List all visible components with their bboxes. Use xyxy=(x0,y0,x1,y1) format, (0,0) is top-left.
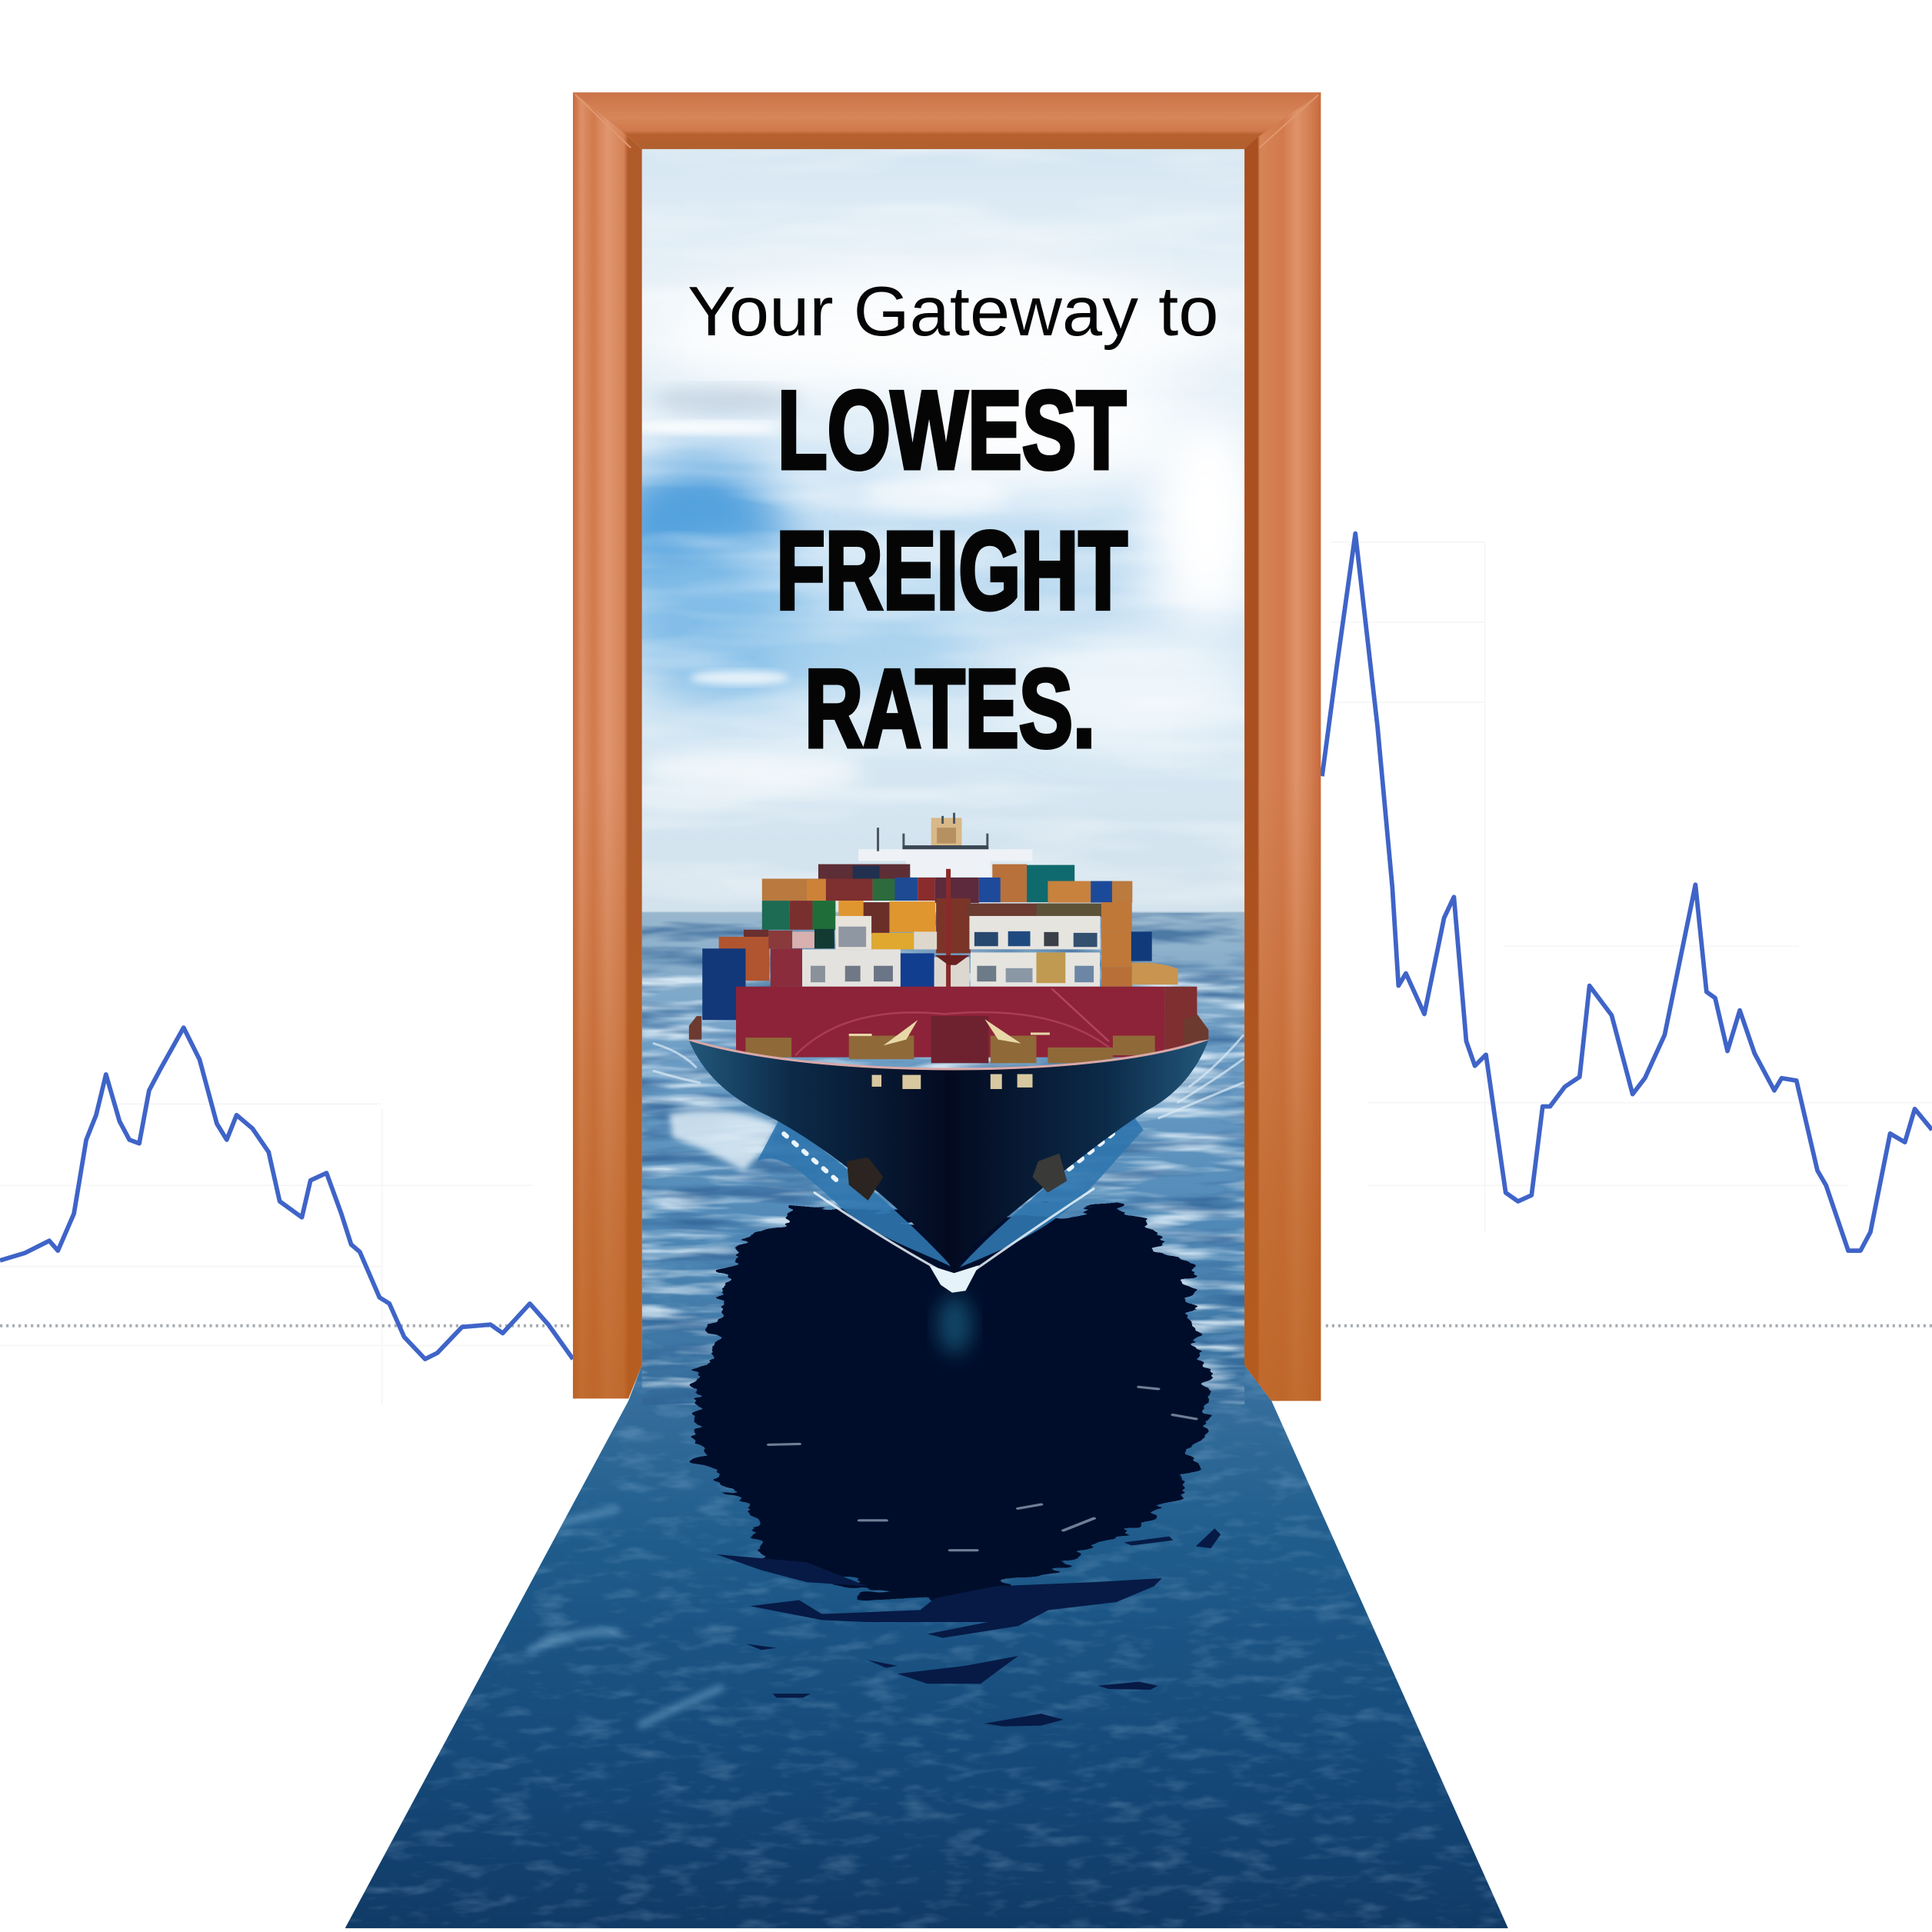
intro line: Your Gateway to xyxy=(688,272,1218,351)
ship shadow reflection xyxy=(694,1201,1221,1727)
ocean carpet flowing through the door xyxy=(333,909,1528,1932)
RATES.: RATES. xyxy=(804,646,1095,771)
LOWEST: LOWEST xyxy=(778,368,1126,492)
door frame xyxy=(573,92,1321,1401)
red deck xyxy=(736,987,1197,1063)
lintel to jamb mitres xyxy=(575,95,1318,148)
container stacks xyxy=(702,864,1178,1020)
hull xyxy=(689,1014,1208,1273)
lintel xyxy=(573,92,1321,149)
right chart: freight rate line xyxy=(1322,534,1932,1326)
container ship xyxy=(654,813,1243,1293)
left chart: freight rate line xyxy=(0,1028,573,1404)
FREIGHT: FREIGHT xyxy=(776,508,1128,632)
icon: foam and bow wave xyxy=(654,1036,1243,1293)
white wash streaks on the carpet xyxy=(530,1509,721,1725)
left jamb xyxy=(573,92,642,1398)
lower jamb shading xyxy=(573,149,1321,1401)
right jamb xyxy=(1244,92,1321,1401)
headline xyxy=(688,272,1218,771)
specular glints xyxy=(769,1387,1196,1551)
icon: bridge superstructure xyxy=(858,813,1033,877)
fine carpet ripples xyxy=(333,1232,1528,1932)
sky inside the doorway xyxy=(610,149,1269,919)
white streaked water at the doorway sides xyxy=(642,912,1244,1404)
horizon haze band xyxy=(642,912,1244,914)
